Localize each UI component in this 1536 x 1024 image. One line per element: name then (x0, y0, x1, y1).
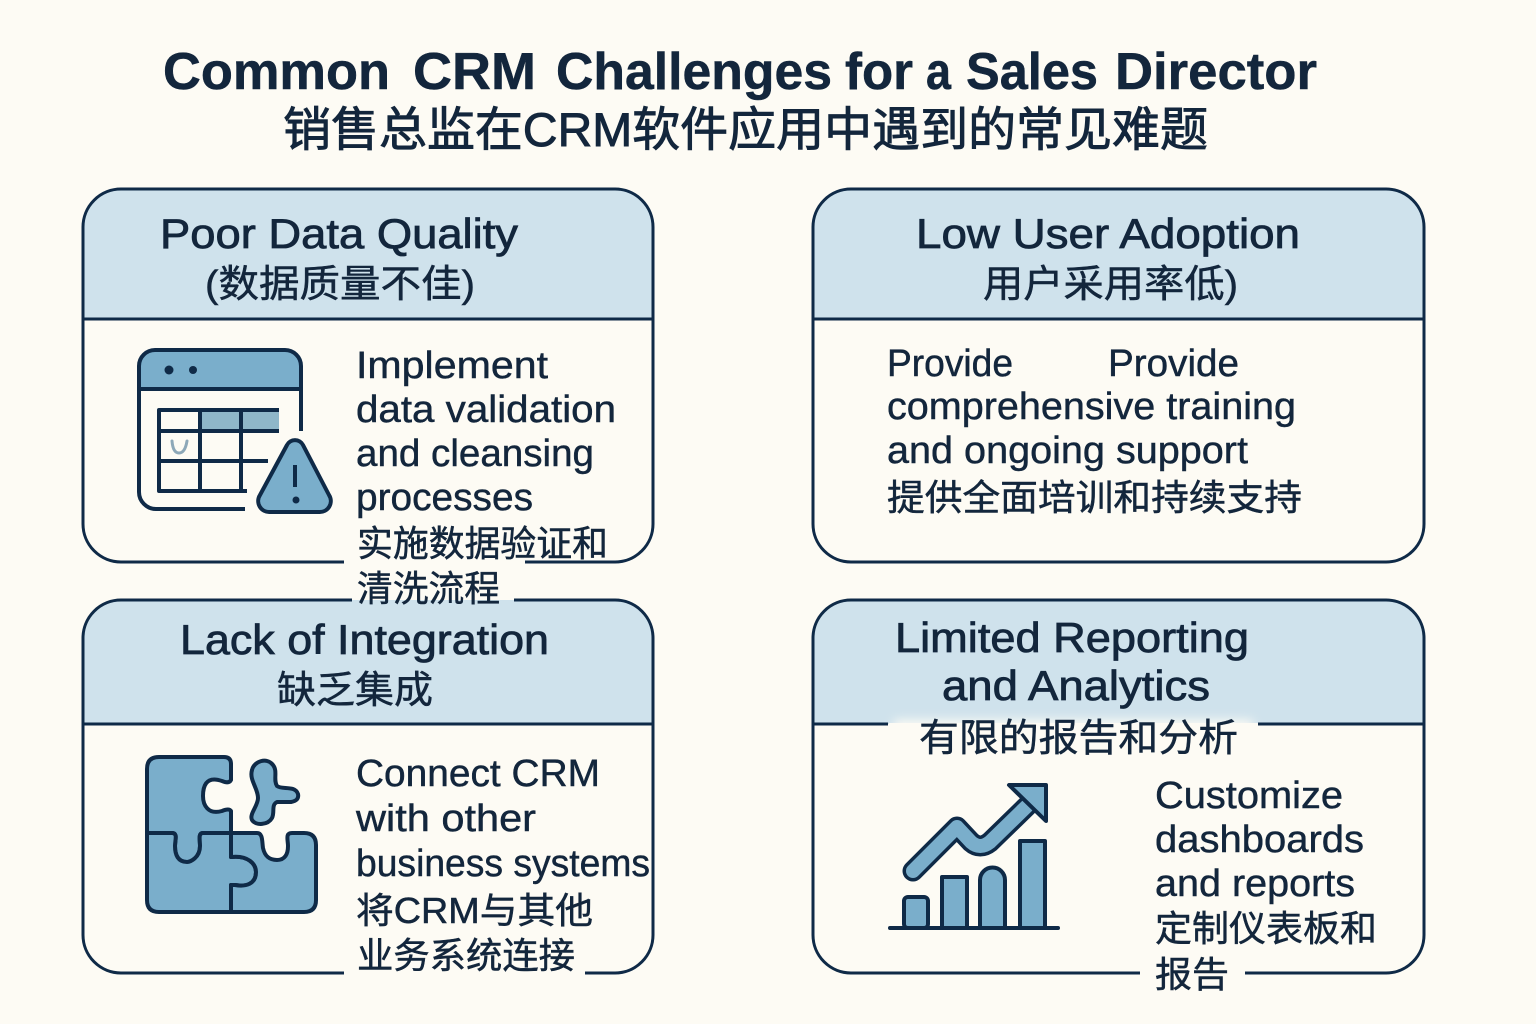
heading: lack of integration: Lack of Integration (180, 616, 549, 663)
title: 销售总监在CRM软件应用中遇到的常见难题 (283, 103, 1208, 156)
text: poor data quality solution (356, 345, 616, 609)
text: limited reporting solution: 定制仪表板和 (1155, 908, 1377, 949)
text: lack of integration solution: Connect CRM (356, 753, 600, 795)
text: lack of integration solution: 将CRM与其他 (356, 890, 593, 931)
title: Challenges (556, 43, 832, 101)
heading: limited reporting and analytics: and Analytics (942, 662, 1210, 709)
text: poor data quality solution: processes (356, 477, 533, 519)
heading: lack of integration: 缺乏集成 (277, 670, 433, 712)
text: lack of integration solution: 业务系统连接 (357, 935, 575, 976)
icon: puzzle pieces (147, 757, 316, 912)
icon: data table with warning (139, 350, 331, 512)
title: Common (163, 43, 390, 101)
icon: growth bar chart (890, 785, 1058, 928)
panel header fill: low user adoption (813, 189, 1424, 319)
panel header fill: poor data quality (83, 189, 653, 319)
title (163, 43, 1317, 156)
panel: lack of integration (83, 600, 653, 976)
title: CRM (413, 43, 536, 101)
text: limited reporting solution: dashboards (1155, 819, 1364, 861)
text: poor data quality solution: 清洗流程 (357, 568, 500, 609)
text: limited reporting solution: Customize (1155, 775, 1343, 817)
text: low user adoption solution: and ongoing support (887, 430, 1248, 472)
text: poor data quality solution: 实施数据验证和 (357, 523, 608, 564)
text: poor data quality solution: data validation (356, 389, 616, 431)
text: limited reporting solution: and reports (1155, 863, 1355, 905)
text: low user adoption solution: Provide (1108, 343, 1239, 385)
text: low user adoption solution: comprehensive training (887, 386, 1296, 428)
heading: limited reporting and analytics: 有限的报告和分析 (919, 718, 1238, 760)
text: poor data quality solution: and cleansing (356, 433, 594, 475)
title: for (845, 43, 913, 101)
text: lack of integration solution (355, 753, 650, 976)
heading: poor data quality: (数据质量不佳) (205, 264, 475, 306)
text: low user adoption solution: Provide (887, 343, 1013, 385)
heading: poor data quality (160, 210, 518, 306)
text: lack of integration solution: business systems (356, 843, 650, 885)
panel: poor data quality (83, 189, 653, 609)
heading: low user adoption (916, 210, 1300, 306)
heading: limited reporting and analytics (895, 614, 1249, 760)
panel header fill: lack of integration (83, 600, 653, 724)
title: a (926, 43, 952, 101)
heading: lack of integration (180, 616, 549, 712)
text: limited reporting solution: 报告 (1155, 954, 1229, 995)
text: low user adoption solution: 提供全面培训和持续支持 (887, 477, 1302, 518)
title: Director (1115, 43, 1317, 101)
panel: low user adoption (813, 189, 1424, 562)
heading: low user adoption: 用户采用率低) (983, 264, 1238, 306)
heading: low user adoption: Low User Adoption (916, 210, 1300, 257)
panel: limited reporting and analytics (813, 600, 1424, 995)
panel header fill: limited reporting and analytics (813, 600, 1424, 724)
text: low user adoption solution (887, 343, 1302, 518)
title: Sales (966, 43, 1098, 101)
text: poor data quality solution: Implement (356, 345, 548, 387)
text: limited reporting solution (1155, 775, 1377, 995)
heading: poor data quality: Poor Data Quality (160, 210, 518, 257)
text: lack of integration solution: with other (355, 798, 536, 840)
heading: limited reporting and analytics: Limited Reporting (895, 614, 1249, 661)
